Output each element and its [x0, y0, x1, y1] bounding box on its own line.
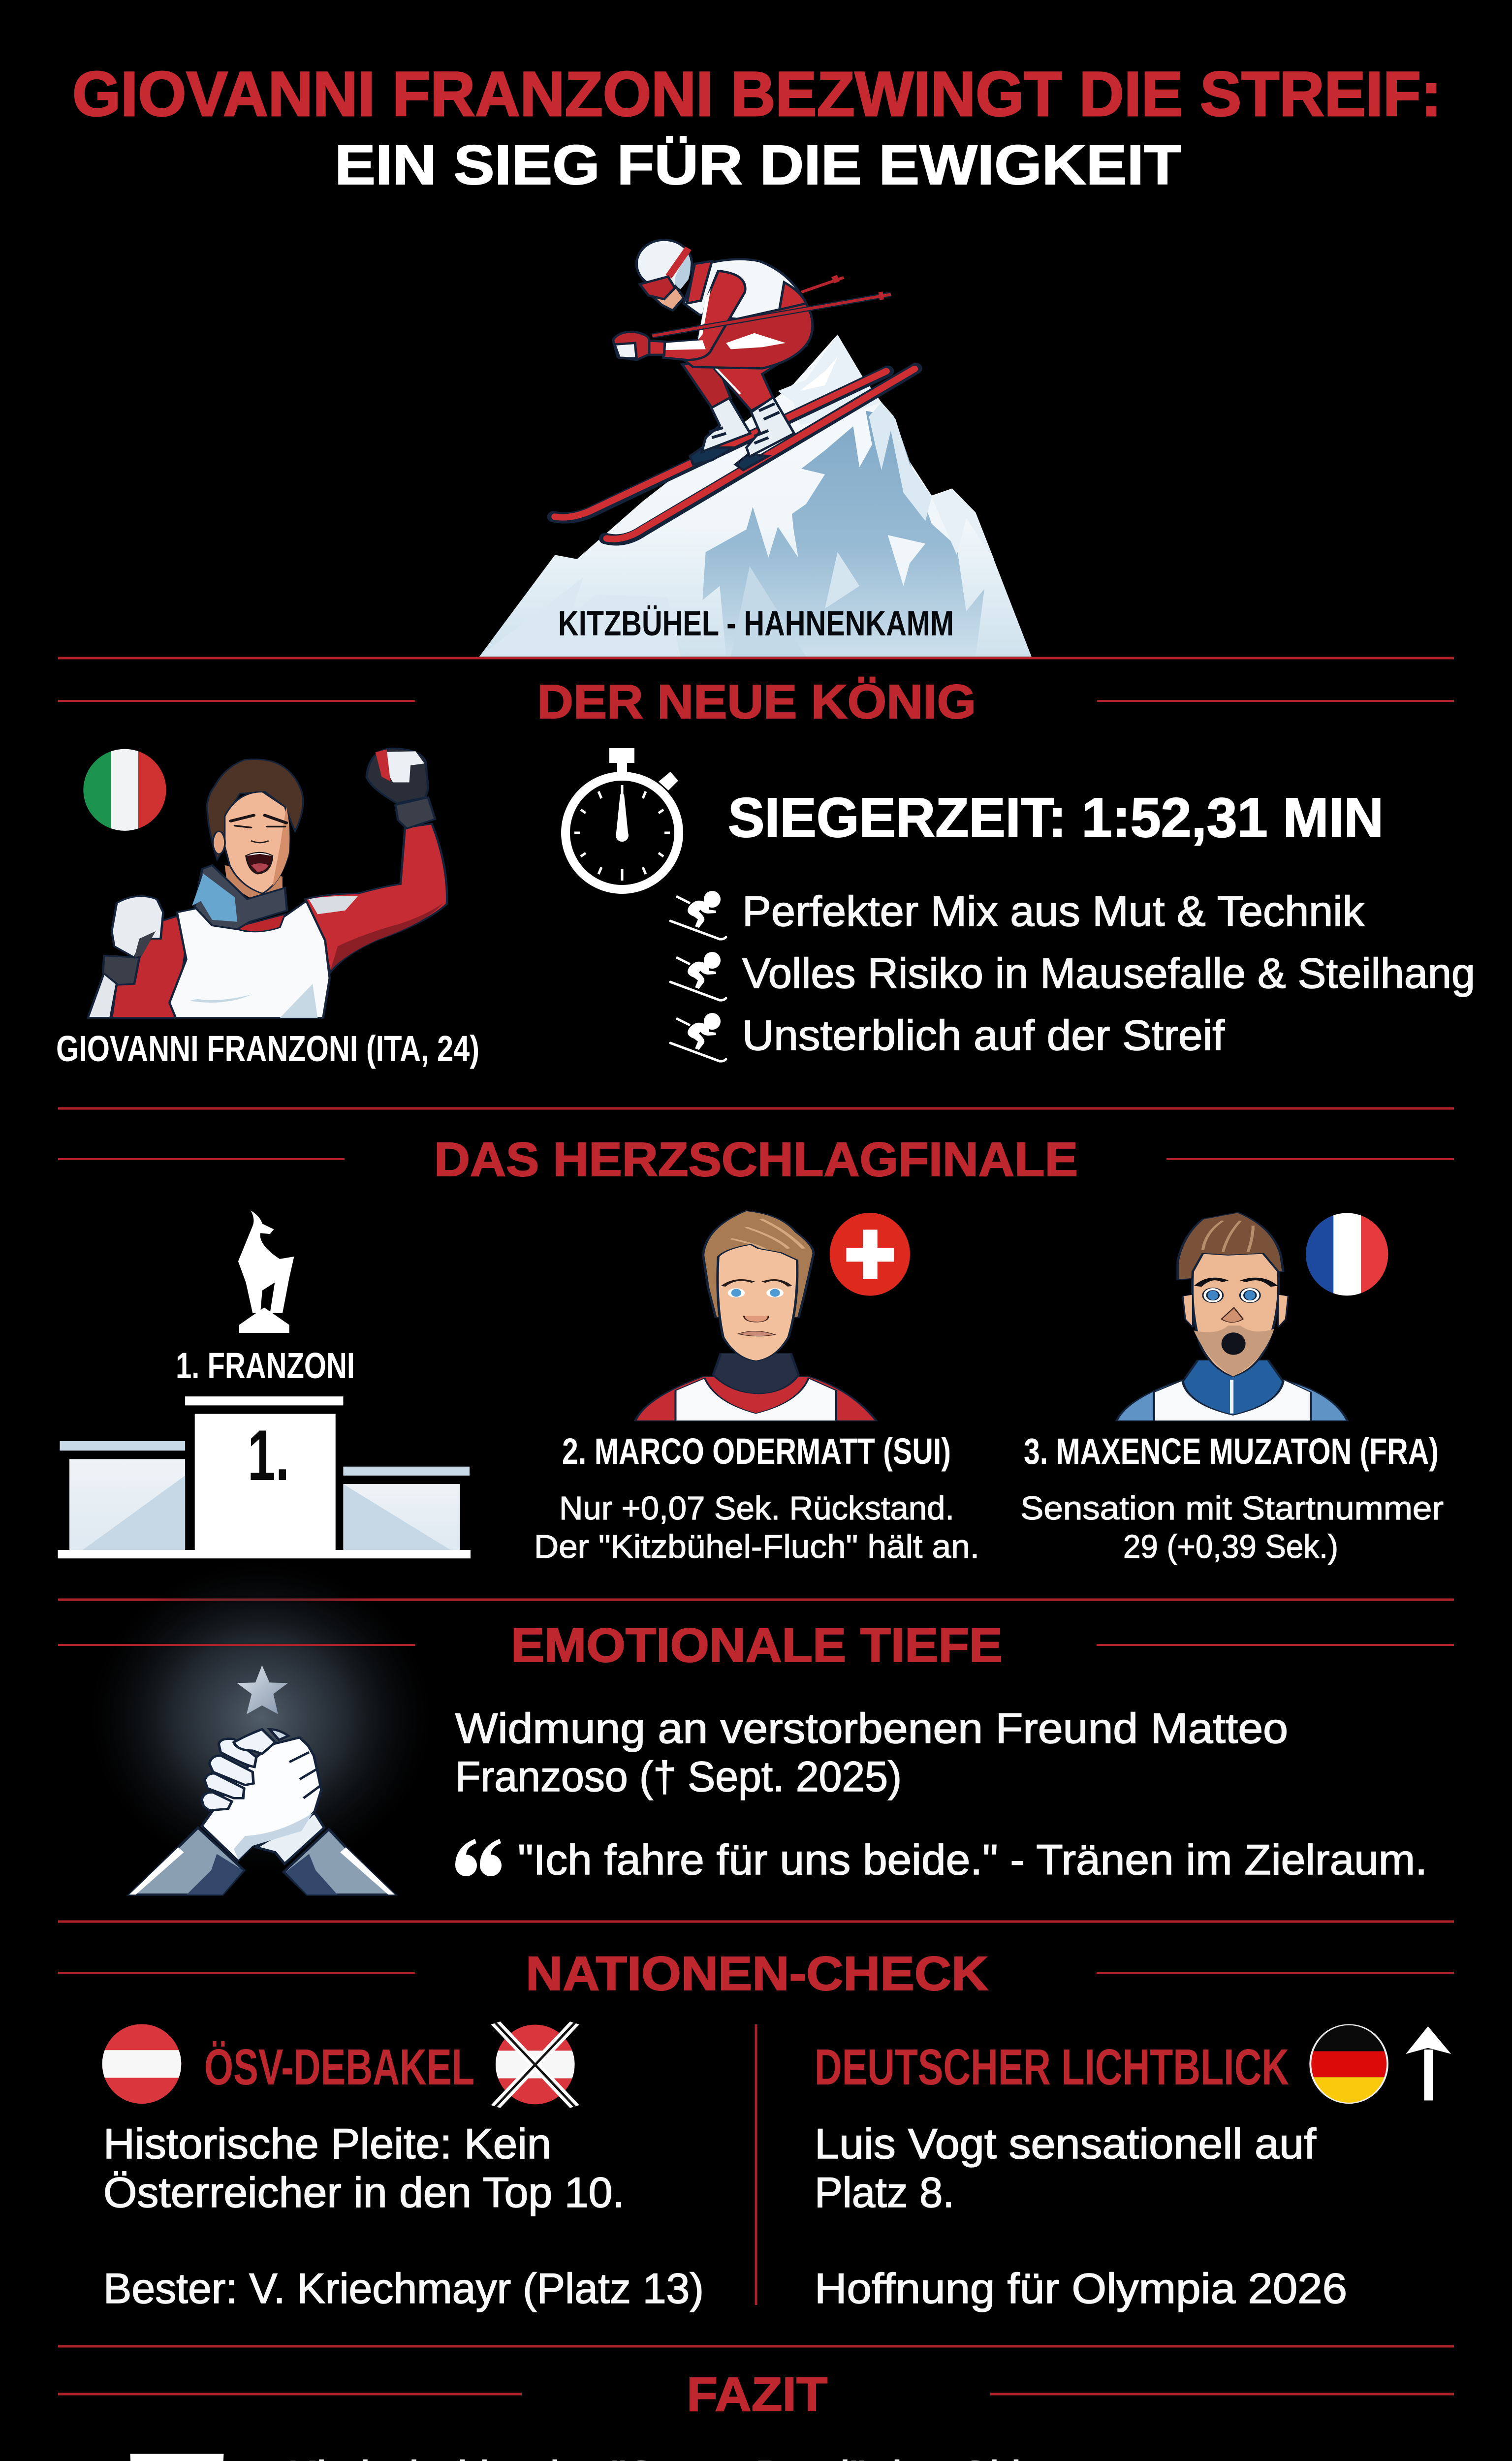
nose: [251, 841, 269, 843]
odermatt details: Nur +0,07 Sek. Rückstand.: [559, 1490, 954, 1527]
suit shoulders: [635, 1377, 877, 1421]
divider: [58, 1599, 1454, 1601]
raised fist: [395, 797, 435, 828]
dedication text: Franzoso († Sept. 2025): [455, 1753, 902, 1800]
boots: [690, 397, 794, 470]
face and helmet: [636, 240, 692, 311]
star: [237, 1665, 288, 1714]
white bib: [169, 901, 330, 1018]
divider: [58, 657, 1454, 660]
hero illustration: skier on mountain: [479, 240, 1032, 657]
skis: [553, 368, 916, 540]
bib: [1154, 1380, 1311, 1421]
ear: [213, 831, 225, 854]
icon: quotation mark: [455, 1839, 502, 1876]
name: odermatt: 2. MARCO ODERMATT (SUI): [562, 1431, 951, 1472]
winning time: SIEGERZEIT: 1:52,31 MIN: [728, 787, 1384, 849]
heading: fazit: FAZIT: [687, 2367, 827, 2421]
bib: [675, 1378, 836, 1421]
front pole: [652, 294, 891, 336]
heading: das herzschlagfinale: DAS HERZSCHLAGFINALE: [434, 1133, 1078, 1186]
panel: das herzschlagfinale: [58, 1133, 1454, 1565]
bullet text 2: Volles Risiko in Mausefalle & Steilhang: [742, 950, 1475, 997]
divider: [58, 1107, 1454, 1109]
open mouth: [1222, 1332, 1246, 1355]
upper body: [663, 259, 813, 368]
podium: [58, 1396, 471, 1558]
illustration: franzoni cheering: [88, 749, 447, 1018]
brows and eyes: [231, 815, 286, 823]
suit collar: [235, 914, 285, 932]
icon: swiss flag: [830, 1213, 910, 1296]
heading: der neue koenig: DER NEUE KÖNIG: [537, 675, 976, 728]
face: [225, 792, 289, 893]
hair strands: [1203, 1221, 1253, 1252]
germany text: [815, 2120, 1347, 2312]
goggles and collar: [194, 865, 287, 929]
sleeves: [129, 1828, 395, 1894]
heading: oesv-debakel: ÖSV-DEBAKEL: [204, 2039, 474, 2095]
muzaton details: Sensation mit Startnummer: [1020, 1490, 1444, 1527]
dedication text: Widmung an verstorbenen Freund Matteo: [455, 1705, 1288, 1752]
face: [1192, 1254, 1279, 1377]
open mouth: [246, 852, 272, 874]
glow behind hands: [89, 1560, 433, 1875]
suit shoulders: [1116, 1380, 1348, 1421]
bullet list: [670, 888, 1475, 1061]
neck gaiter: [713, 1354, 798, 1394]
icon: skier 3: [670, 1013, 726, 1061]
lower wrist: [256, 1813, 324, 1864]
icon: clasped hands and star: [129, 1665, 395, 1894]
odermatt details: [534, 1490, 979, 1565]
austria text: Historische Pleite: Kein: [103, 2120, 551, 2168]
panel: der neue koenig: [56, 675, 1475, 1069]
knuckle lines: [289, 1752, 321, 1798]
icon: french flag: [1303, 1212, 1391, 1296]
mountain: [479, 335, 1032, 657]
divider: [58, 2345, 1454, 2348]
zipper: [1230, 1380, 1233, 1414]
bullet text 1: Perfekter Mix aus Mut & Technik: [742, 888, 1365, 935]
athlete caption: GIOVANNI FRANZONI (ITA, 24): [56, 1028, 479, 1069]
germany text: Platz 8.: [815, 2169, 954, 2216]
panel: emotionale tiefe: [58, 1560, 1454, 1894]
austria text: Bester: V. Kriechmayr (Platz 13): [103, 2265, 704, 2312]
mouth: [738, 1331, 775, 1336]
icon: skier 2: [670, 952, 726, 1000]
portrait: maxence muzaton: [1116, 1212, 1348, 1421]
germany text: Luis Vogt sensationell auf: [815, 2120, 1317, 2168]
heading: nationen-check: NATIONEN-CHECK: [526, 1947, 988, 2000]
bullet text 3: Unsterblich auf der Streif: [742, 1012, 1225, 1059]
left arm: [112, 916, 187, 1018]
austria text: [103, 2120, 704, 2312]
stubble: [1194, 1325, 1274, 1377]
mountain label: KITZBÜHEL - HAHNENKAMM: [558, 604, 954, 643]
main hand: [202, 1737, 321, 1861]
icon: stopwatch: [566, 748, 679, 889]
hair: [207, 759, 303, 859]
heading: deutscher lichtblick: DEUTSCHER LICHTBLICK: [815, 2039, 1289, 2095]
panel: nationen-check: [58, 1947, 1454, 2312]
hair strands: [731, 1219, 804, 1250]
face: [718, 1244, 797, 1361]
skis and skier: [553, 240, 916, 540]
icon: up arrow: [1406, 2026, 1451, 2100]
muzaton details: [1020, 1490, 1444, 1565]
squinted eyes: [235, 826, 285, 827]
glove: [613, 332, 665, 360]
icon: german flag: [1309, 2024, 1388, 2104]
portrait: marco odermatt: [635, 1211, 877, 1421]
icon: crossed austrian flag: [492, 2022, 583, 2108]
nose: [1222, 1308, 1243, 1323]
brows: [723, 1280, 790, 1286]
icon: italian flag: [82, 747, 168, 833]
title line 1: GIOVANNI FRANZONI BEZWINGT DIE STREIF:: [72, 59, 1442, 129]
nose: [744, 1316, 768, 1322]
divider: [58, 1921, 1454, 1923]
ears: [1183, 1294, 1288, 1327]
neck: [225, 865, 283, 899]
lower fist: [103, 956, 139, 985]
brows: [1198, 1279, 1274, 1286]
icon: trophy: [108, 2454, 245, 2461]
icon: austrian flag: [102, 2024, 181, 2104]
icon: chamois trophy: [238, 1210, 294, 1333]
eyes: [728, 1288, 784, 1297]
eyes: [1203, 1288, 1260, 1303]
panel: fazit: [58, 2367, 1454, 2461]
title line 2: EIN SIEG FÜR DIE EWIGKEIT: [335, 134, 1181, 196]
fingers: [202, 1729, 288, 1810]
title: [72, 59, 1442, 196]
raised arm: [305, 824, 447, 973]
collar: [1183, 1360, 1283, 1415]
hair back: [703, 1211, 814, 1318]
vertical divider: [755, 2024, 757, 2305]
legs: [682, 329, 806, 411]
muzaton details: 29 (+0,39 Sek.): [1123, 1528, 1338, 1565]
hair: [1178, 1212, 1283, 1280]
germany text: Hoffnung für Olympia 2026: [815, 2265, 1347, 2312]
dedication text: [455, 1705, 1288, 1800]
rear pole: [801, 278, 844, 292]
odermatt details: Der "Kitzbühel-Fluch" hält an.: [534, 1528, 979, 1565]
first place label: 1. FRANZONI: [176, 1345, 355, 1386]
quote text: "Ich fahre für uns beide." - Tränen im Zielraum.: [518, 1836, 1427, 1884]
austria text: Österreicher in den Top 10.: [103, 2169, 625, 2216]
podium number: 1.: [248, 1415, 289, 1495]
icon: skier 1: [670, 891, 726, 939]
heading: emotionale tiefe: EMOTIONALE TIEFE: [511, 1618, 1003, 1672]
